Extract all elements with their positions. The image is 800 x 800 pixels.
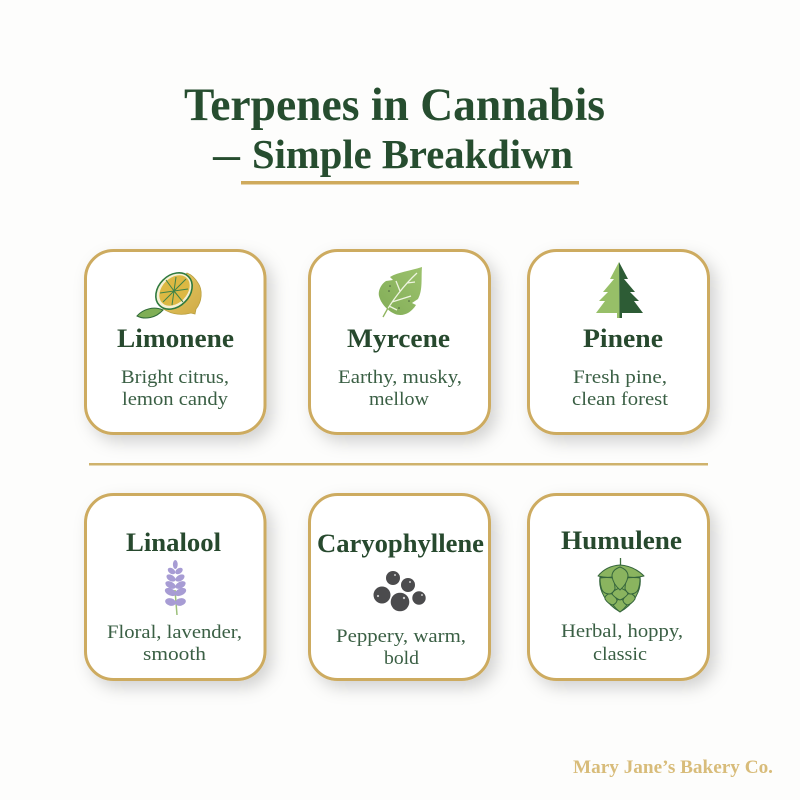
description: clean forest bbox=[572, 389, 669, 410]
name: Myrcene bbox=[347, 323, 450, 353]
description: Floral, lavender, bbox=[107, 622, 242, 643]
icon: lemon bbox=[137, 266, 201, 318]
title: — bbox=[212, 131, 241, 177]
name: Pinene bbox=[583, 323, 663, 353]
description bbox=[107, 622, 242, 665]
description bbox=[336, 626, 466, 669]
panel: Pinene bbox=[528, 250, 708, 434]
description bbox=[338, 367, 462, 410]
icon: pine tree bbox=[596, 262, 643, 318]
description: Bright citrus, bbox=[121, 367, 229, 388]
name: Humulene bbox=[561, 525, 682, 555]
title bbox=[184, 79, 605, 177]
description bbox=[121, 367, 229, 410]
panel: Caryophyllene bbox=[310, 494, 490, 680]
title underline bbox=[241, 181, 579, 184]
description: bold bbox=[384, 648, 420, 669]
description: mellow bbox=[369, 389, 429, 410]
title: Terpenes in Cannabis bbox=[184, 79, 605, 131]
description: smooth bbox=[143, 644, 207, 665]
panel: Myrcene bbox=[310, 250, 490, 434]
description bbox=[561, 621, 683, 665]
panel: Limonene bbox=[86, 250, 265, 434]
divider bbox=[89, 463, 708, 466]
panel: Linalool bbox=[86, 494, 265, 680]
name: Limonene bbox=[117, 323, 234, 353]
panel: Humulene bbox=[528, 494, 708, 680]
title: Simple Breakdiwn bbox=[252, 131, 573, 177]
icon: lavender bbox=[164, 560, 187, 615]
description bbox=[572, 367, 669, 410]
name: Caryophyllene bbox=[317, 528, 484, 558]
icon: hop cone bbox=[598, 558, 644, 612]
description: Herbal, hoppy, bbox=[561, 621, 683, 642]
description: lemon candy bbox=[122, 389, 229, 410]
icon: peppercorns bbox=[374, 571, 426, 611]
footer brand: Mary Jane’s Bakery Co. bbox=[573, 757, 773, 778]
description: Fresh pine, bbox=[573, 367, 667, 388]
name: Linalool bbox=[126, 527, 221, 557]
description: classic bbox=[593, 644, 647, 665]
description: Peppery, warm, bbox=[336, 626, 466, 647]
icon: leaf bbox=[379, 267, 422, 317]
description: Earthy, musky, bbox=[338, 367, 462, 388]
